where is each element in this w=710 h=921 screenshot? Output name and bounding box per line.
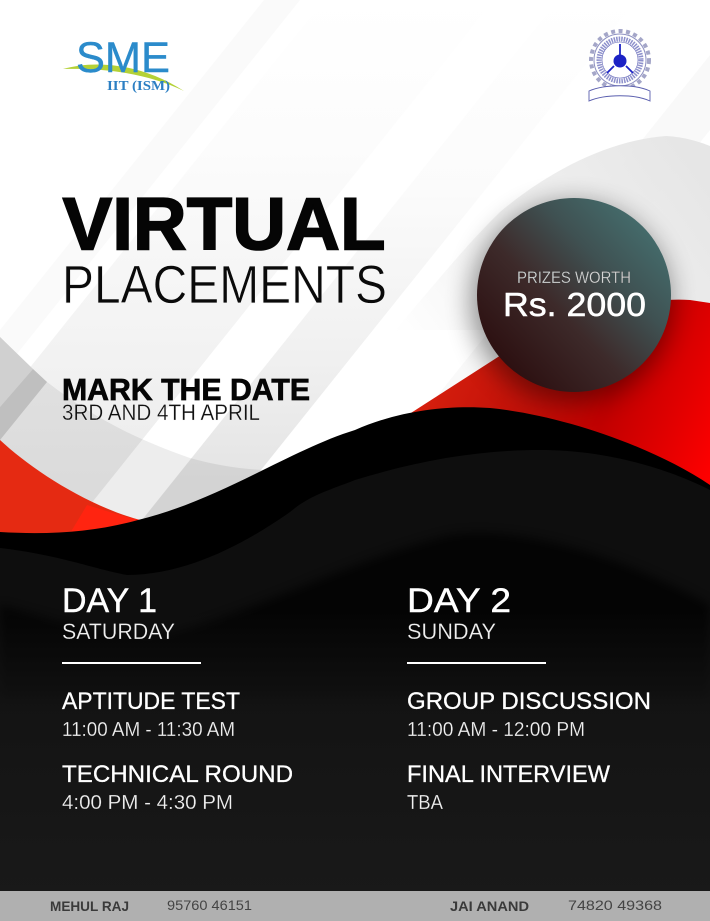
grey lower-left wave — [0, 382, 262, 520]
day 2 schedule: GROUP DISCUSSION — [407, 688, 651, 715]
black wave — [0, 407, 710, 921]
day 2 schedule: DAY 2 — [407, 582, 511, 620]
day 2 schedule: 11:00 AM - 12:00 PM — [407, 719, 585, 741]
date block — [62, 372, 310, 425]
red right wave — [400, 300, 710, 520]
footer contact bar: 95760 46151 — [167, 897, 252, 913]
logo: SME — [63, 34, 184, 94]
footer contact bar: JAI ANAND — [450, 898, 529, 914]
emblem ribbon — [589, 86, 650, 101]
title: PLACEMENTS — [62, 255, 387, 315]
day 1 schedule: APTITUDE TEST — [62, 688, 240, 715]
day 1 schedule: 11:00 AM - 11:30 AM — [62, 719, 235, 741]
title: VIRTUAL — [62, 182, 386, 266]
red lower-left bright facet — [66, 505, 140, 540]
circle shadow — [471, 202, 671, 402]
day 1 schedule — [62, 582, 293, 814]
day 1 schedule: 4:00 PM - 4:30 PM — [62, 792, 233, 814]
red lower-left wave — [0, 440, 140, 540]
left edge grey stripes — [0, 337, 33, 407]
logo: SME: SME — [76, 34, 170, 82]
day 1 schedule: DAY 1 — [62, 582, 157, 620]
day 2 schedule — [407, 582, 651, 814]
day 2 schedule: TBA — [407, 792, 444, 814]
date block: 3RD AND 4TH APRIL — [62, 400, 260, 425]
dark inner wave — [0, 450, 710, 921]
day 2 schedule: SUNDAY — [407, 619, 496, 644]
dark lower panel — [0, 610, 710, 895]
day 1 schedule: SATURDAY — [62, 619, 175, 644]
green swoosh — [63, 64, 184, 91]
title — [62, 182, 387, 315]
prize badge — [477, 198, 671, 392]
day 2 schedule: FINAL INTERVIEW — [407, 761, 610, 788]
footer contact bar: 74820 49368 — [568, 897, 662, 913]
black soft lower wave — [0, 533, 710, 700]
footer contact bar — [0, 891, 710, 921]
logo: institute emblem — [589, 31, 650, 101]
grey right wave — [300, 136, 710, 430]
prize badge: PRIZES WORTH — [517, 268, 631, 287]
diagonal light bands — [0, 0, 710, 560]
footer contact bar: MEHUL RAJ — [50, 898, 129, 914]
date block: MARK THE DATE — [62, 372, 310, 407]
prize badge: Rs. 2000 — [503, 286, 646, 323]
logo: SME: IIT (ISM) — [107, 79, 170, 94]
day 1 schedule: TECHNICAL ROUND — [62, 761, 293, 788]
